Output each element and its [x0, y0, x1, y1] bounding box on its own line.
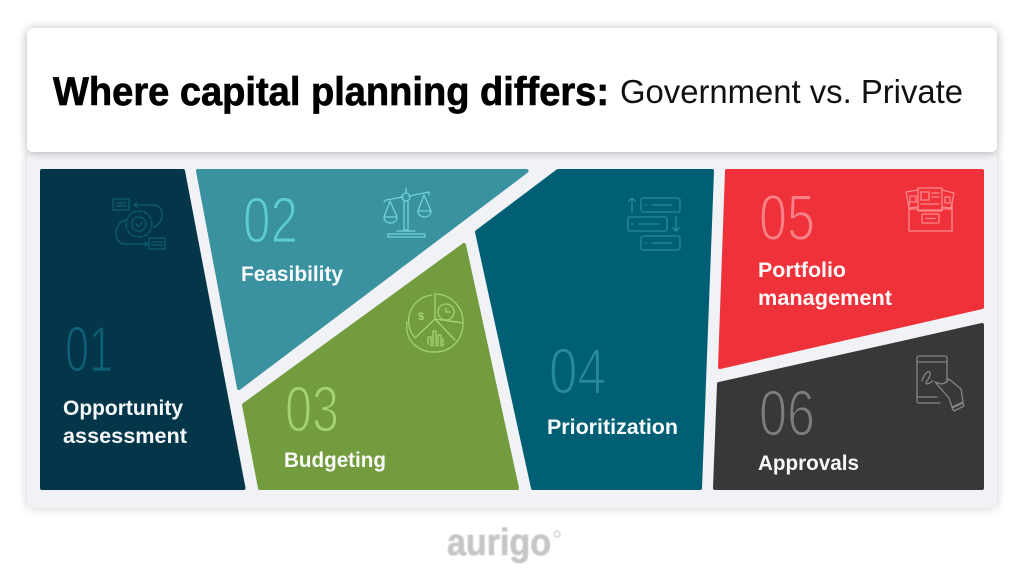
icon: signing on tablet [917, 356, 964, 411]
panel 06: approvals [715, 325, 982, 488]
number 02: 02 [243, 184, 298, 256]
logo: aurigo: aurigo [447, 522, 551, 564]
number 01: 01 [65, 312, 113, 386]
icon: budget pie chart [407, 294, 463, 352]
label: budgeting: Budgeting [284, 448, 386, 472]
panel 01: opportunity assessment [42, 171, 244, 488]
icon: gear process [113, 199, 165, 249]
panel 02: feasibility [198, 171, 526, 388]
label: portfolio management [758, 258, 892, 310]
number 05: 05 [759, 181, 815, 254]
panel 04: prioritization [477, 171, 712, 488]
panel 05: portfolio management [720, 171, 982, 367]
title [53, 70, 963, 114]
background panel [27, 150, 997, 508]
icon: budget pie chart: $ [418, 311, 424, 323]
title card [27, 28, 997, 152]
label: opportunity assessment: Opportunity [63, 396, 183, 420]
label: approvals: Approvals [758, 451, 859, 475]
label: prioritization: Prioritization [547, 415, 678, 439]
title: Where capital planning differs: [53, 70, 609, 114]
icon: portfolio drawer [906, 188, 954, 231]
label: opportunity assessment: assessment [63, 424, 187, 448]
label: portfolio management: management [758, 286, 892, 310]
number 03: 03 [285, 372, 339, 446]
number 06: 06 [759, 376, 815, 450]
icon: priority list [628, 198, 680, 250]
label: portfolio management: Portfolio [758, 258, 846, 282]
number 04: 04 [549, 334, 606, 408]
title: Government vs. Private [620, 73, 963, 110]
icon: scales [384, 188, 431, 237]
label: opportunity assessment [63, 396, 187, 448]
panel 03: budgeting [244, 245, 517, 488]
label: feasibility: Feasibility [241, 262, 343, 286]
